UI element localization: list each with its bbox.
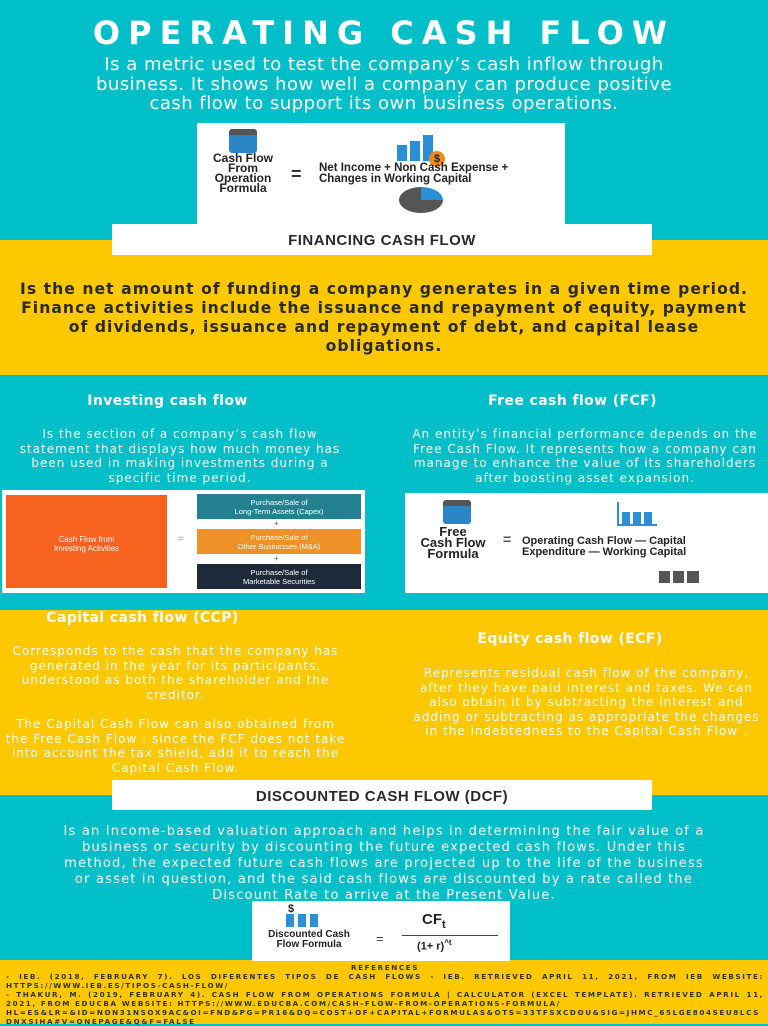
- diagram: +: [274, 554, 279, 563]
- diagram: [2, 490, 365, 593]
- references: REFERENCES: [351, 963, 419, 972]
- formula box: Cash Flow: [420, 535, 486, 550]
- heading: Investing cash flow: [87, 393, 248, 409]
- diagram: Investing Activities: [54, 544, 119, 553]
- text: The Capital Cash Flow can also obtained from the Free Cash Flow : since the FCF does not take into account the tax shield, add it to reach the Capital Cash Flow.: [6, 717, 345, 775]
- formula label: Cash Flow: [213, 151, 273, 165]
- band: lower yellow: [0, 610, 768, 795]
- DCF formula box: CFt: [422, 911, 446, 931]
- text: Corresponds to the cash that the company has generated in the year for its participants, understood as both the shareholder and the creditor.: [12, 644, 338, 702]
- heading: Capital cash flow (CCP): [46, 610, 239, 626]
- panel: free cash flow: [405, 393, 768, 593]
- formula box: Free: [439, 524, 467, 539]
- diagram: Purchase/Sale of: [250, 498, 308, 507]
- icon: calculator: [229, 129, 257, 153]
- formula box: Expenditure — Working Capital: [522, 546, 686, 558]
- references: - THAKUR, M. (2019, FEBRUARY 4). CASH FLOW FROM OPERATIONS FORMULA | CALCULATOR (EXCEL TEMPLATE). RETRIEVED APRIL 11, 2021, FROM EDUCBA WEBSITE: HTTPS://WWW.EDUCBA.COM/CASH-FLOW-FROM-OPERATIONS-FORMULA/: [6, 990, 764, 1008]
- text: An entity’s financial performance depends on the Free Cash Flow. It represents how a company can manage to enhance the value of its shareholders after boosting asset expansion.: [412, 427, 758, 485]
- formula text: Changes in Working Capital: [319, 173, 472, 185]
- formula box: [405, 493, 768, 593]
- operating formula box: [197, 123, 565, 226]
- text: Is the section of a company’s cash flow statement that displays how much money has been used in making investments during a specific time period.: [20, 427, 340, 485]
- heading: financing cash flow: FINANCING CASH FLOW: [288, 232, 476, 249]
- references: [6, 963, 764, 1026]
- text: [6, 644, 345, 775]
- diagram: Purchase/Sale of: [250, 533, 308, 542]
- title: OPERATING CASH FLOW: [93, 14, 675, 52]
- diagram: Long-Term Assets (Capex): [235, 507, 323, 516]
- diagram: =: [178, 534, 184, 545]
- panel: capital cash flow: [6, 610, 345, 775]
- heading: financing cash flow: [112, 224, 652, 255]
- panel: equity cash flow: [413, 631, 760, 738]
- operating formula box: =: [291, 164, 302, 184]
- heading: discounted cash flow: DISCOUNTED CASH FLOW (DCF): [256, 788, 508, 805]
- diagram: +: [274, 519, 279, 528]
- heading: discounted cash flow: [112, 780, 652, 810]
- DCF text: Is an Income-based valuation approach and helps in determining the fair value of a business or security by discounting the future expected cash flows. Under this method, the expected future cash flows are projected up to the life of the business or asset in question, and the said cash flows are discounted by a rate called the Discount Rate to arrive at the Present Value.: [63, 824, 705, 903]
- formula box: Operating Cash Flow — Capital: [522, 535, 686, 547]
- formula label: From: [228, 161, 258, 175]
- formula label: Formula: [219, 181, 267, 195]
- references: - IEB. (2018, FEBRUARY 7). LOS DIFERENTES TIPOS DE CASH FLOWS - IEB. RETRIEVED APRIL 11, 2021, FROM IEB WEBSITE: HTTPS://WWW.IEB.ES/TIPOS-CASH-FLOW/: [6, 972, 764, 990]
- formula label: Operation: [215, 171, 271, 185]
- band: financing yellow: [0, 240, 768, 375]
- diagram: Marketable Securities: [243, 577, 315, 586]
- formula label: [213, 151, 273, 195]
- heading: Equity cash flow (ECF): [477, 631, 663, 647]
- intro text: Is a metric used to test the company’s cash inflow through business. It shows how well a company can produce positive cash flow to support its own business operations.: [96, 54, 672, 114]
- icon: bar chart with dollar: [397, 135, 445, 167]
- DCF formula box: =: [376, 931, 384, 946]
- DCF formula box: [252, 901, 510, 961]
- references: HL=ES&LR=&ID=NON31NSOX9AC&OI=FND&PG=PR16&DQ=COST+OF+CAPITAL+FORMULAS&OTS=33TFSXCDOU&SIG=JHMC_65LGE804SEU8LCSDNXSIHA#V=ONEPAGE&Q&F=FALSE: [6, 1008, 760, 1026]
- DCF formula box: Discounted Cash: [268, 929, 350, 940]
- icon: pie: [399, 187, 443, 213]
- diagram: Purchase/Sale of: [250, 568, 308, 577]
- icon: bar chart with dollar: $: [434, 153, 440, 165]
- band: middle teal: [0, 375, 768, 610]
- heading: Free cash flow (FCF): [488, 393, 657, 409]
- DCF formula box: Flow Formula: [276, 939, 342, 950]
- formula box: =: [503, 531, 511, 547]
- text: Represents residual cash flow of the company, after they have paid interest and taxes. We can also obtain it by subtracting the interest and adding or subtracting as appropriate the changes in the indebtedness to the Capital Cash Flow .: [413, 666, 760, 738]
- band: references yellow: [0, 960, 768, 1024]
- diagram: Cash Flow from: [58, 535, 114, 544]
- panel: investing cash flow: [2, 393, 365, 593]
- formula text: [319, 162, 508, 185]
- financing text: Is the net amount of funding a company generates in a given time period. Finance activities include the issuance and repayment of equity, payment of dividends, issuance and repayment of debt, and capital lease obligations.: [20, 280, 748, 355]
- formula text: Net Income + Non Cash Expense +: [319, 162, 508, 174]
- band: top teal: [0, 0, 768, 240]
- diagram: Other Businesses (M&A): [238, 542, 320, 551]
- formula box: Formula: [427, 546, 479, 561]
- DCF formula box: (1+ r)^t: [417, 938, 452, 953]
- DCF formula box: $: [288, 903, 294, 915]
